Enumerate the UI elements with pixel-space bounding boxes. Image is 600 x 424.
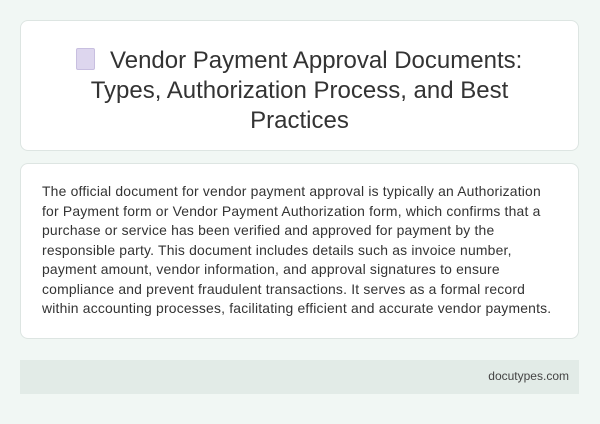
text block: The official document for vendor payment approval is typically an Authorization for Payment form or Vendor Payment Authorization form, which confirms that a purchase or service has been verified and approved for payment by the responsible party. This document includes details such as invoice number, payment amount, vendor information, and approval signatures to ensure compliance and prevent fraudulent transactions. It serves as a formal record within accounting processes, facilitating efficient and accurate vendor payments. xyxy=(42,183,551,316)
panel: description xyxy=(20,163,579,339)
title: Vendor Payment Approval Documents: Types, Authorization Process, and Best Practices xyxy=(91,47,522,134)
footer xyxy=(20,360,579,394)
panel: title xyxy=(20,20,579,151)
icon: document xyxy=(76,48,95,70)
footer text: docutypes.com xyxy=(488,369,569,383)
